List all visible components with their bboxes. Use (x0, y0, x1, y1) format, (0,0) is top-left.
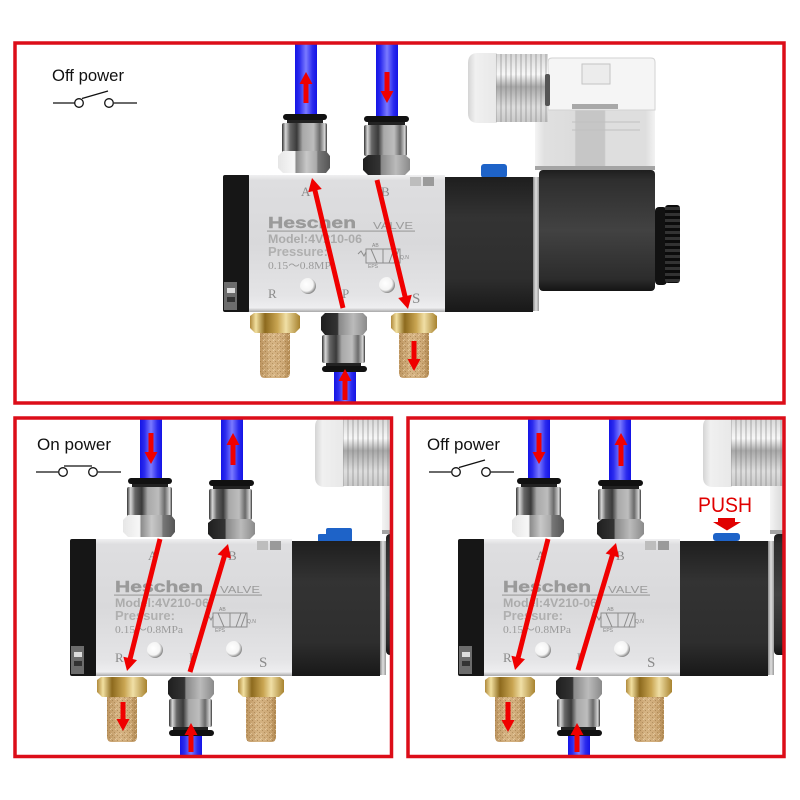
valve symbol (358, 243, 409, 270)
port letters: P (577, 650, 584, 665)
brand and rating text (267, 215, 415, 272)
port letters: R (268, 286, 277, 301)
valve symbol: AB (607, 607, 614, 613)
label: push: PUSH (698, 494, 752, 517)
fitting P (321, 313, 367, 372)
brand and rating text: 0.15～0.8MPa (268, 260, 336, 272)
transparent connector (703, 417, 800, 534)
air tube A (295, 44, 317, 116)
valve assembly, lower right panel (458, 408, 800, 768)
icon: open switch (429, 460, 514, 476)
brand and rating text: Heschen (115, 579, 203, 596)
cable gland (655, 205, 680, 285)
port letters: R (503, 650, 512, 665)
flow arrow: tube A down (144, 433, 158, 464)
flow arrow: tube P up (338, 369, 352, 400)
flow arrow: A to R (123, 538, 162, 671)
flow arrow: tube A up (300, 72, 312, 103)
valve left end cap (458, 539, 485, 676)
brand and rating text: Model:4V210-06 (268, 232, 362, 246)
brand and rating text: Heschen (268, 215, 356, 232)
silencer S (391, 313, 437, 378)
air tube P (334, 372, 356, 402)
fitting P (168, 677, 214, 736)
flow arrow: tube P up (570, 723, 584, 752)
valve symbol: Q.N (247, 619, 256, 625)
valve symbol: EPS (603, 628, 614, 634)
air tube P (568, 734, 590, 768)
transparent connector (315, 420, 390, 534)
port letters: S (412, 291, 420, 307)
heading: off power: Off power (427, 435, 500, 454)
flow arrow: silencer R down (116, 702, 130, 731)
transparent connector (468, 53, 655, 170)
flow arrow: P to B (188, 544, 231, 673)
brand and rating text: Model:4V210-06 (115, 596, 209, 610)
fitting B (363, 116, 410, 175)
valve left end cap (70, 539, 97, 676)
fitting B (597, 480, 644, 539)
brand and rating text (502, 579, 650, 636)
valve symbol: Q.N (635, 619, 644, 625)
valve left end cap (223, 175, 250, 312)
mounting holes (300, 278, 316, 294)
solenoid coil (533, 170, 655, 311)
flow arrow: silencer R down (502, 702, 514, 732)
flow arrow: silencer S down (408, 341, 420, 371)
manual push button (318, 528, 352, 541)
brand and rating text: VALVE (373, 221, 413, 232)
flow arrow: P to A (308, 178, 345, 309)
port letters: B (228, 548, 237, 563)
air tube B (609, 408, 631, 482)
port letters: R (115, 650, 124, 665)
panel: on power, flow P to B and A to R (13, 416, 394, 758)
port letters (503, 548, 655, 671)
brand and rating text: VALVE (220, 585, 260, 596)
port letters (268, 184, 420, 307)
air tube A (528, 408, 550, 480)
flow arrow: tube P up (184, 723, 198, 752)
fitting A (512, 478, 564, 537)
flow arrow: A to R (511, 538, 550, 670)
valve symbol (205, 607, 256, 634)
port letters: B (381, 184, 390, 199)
silencer R (97, 677, 147, 742)
brand and rating text: VALVE (608, 585, 648, 596)
air tube P (180, 736, 202, 755)
silencer S (626, 677, 672, 742)
silencer R (485, 677, 535, 742)
port letters: A (148, 548, 158, 563)
manual push button, pressed (713, 533, 740, 541)
port letters: S (647, 655, 655, 671)
valve symbol: AB (219, 607, 226, 613)
panel frame (408, 418, 784, 756)
flow arrow: tube A down (532, 433, 546, 464)
valve symbol: Q.N (400, 255, 409, 261)
air tube B (376, 44, 398, 118)
valve symbol: EPS (368, 264, 379, 270)
icon: open switch (53, 91, 137, 107)
aluminium valve face (249, 175, 445, 312)
solenoid coil (768, 534, 800, 675)
valve right housing (445, 177, 533, 312)
solenoid coil (380, 534, 390, 675)
aluminium valve face (484, 539, 680, 676)
heading: off power: Off power (52, 66, 124, 85)
silencer S (238, 677, 284, 742)
brand and rating text: Pressure: (115, 608, 175, 623)
flow arrow: B to S (375, 179, 412, 309)
brand and rating text: Model:4V210-06 (503, 596, 597, 610)
port letters: A (536, 548, 546, 563)
fitting P (556, 677, 602, 736)
air tube A (140, 420, 162, 478)
silencer R (250, 313, 300, 378)
fitting A (123, 478, 175, 537)
mounting holes (147, 642, 163, 658)
brand and rating text: Pressure: (268, 244, 328, 259)
panel frame (15, 43, 784, 403)
valve symbol: AB (372, 243, 379, 249)
port letters (115, 548, 267, 671)
fitting B (208, 480, 255, 539)
flow arrow: tube B up (614, 433, 628, 466)
brand and rating text: 0.15～0.8MPa (115, 624, 183, 636)
brand and rating text: 0.15～0.8MPa (503, 624, 571, 636)
mounting holes (535, 642, 551, 658)
port letters: S (259, 655, 267, 671)
panel: off power with manual push, flow P to B and A to R (408, 408, 800, 768)
arrow: push down (713, 518, 741, 530)
flow arrow: P to B (576, 543, 619, 671)
valve right housing (292, 541, 380, 676)
valve assembly, lower left panel (70, 420, 390, 755)
valve symbol (593, 607, 644, 634)
port letters: P (189, 650, 196, 665)
air tube B (221, 420, 243, 480)
port letters: B (616, 548, 625, 563)
port letters: P (342, 286, 349, 301)
aluminium valve face (96, 539, 292, 676)
heading: on power: On power (37, 435, 111, 454)
panel frame (15, 418, 392, 756)
valve right housing (680, 541, 768, 676)
valve symbol: EPS (215, 628, 226, 634)
flow arrow: tube B up (226, 433, 240, 465)
brand and rating text (114, 579, 262, 636)
manual push button (481, 164, 507, 178)
flow arrow: tube B down (380, 72, 394, 103)
brand and rating text: Heschen (503, 579, 591, 596)
fitting A (278, 114, 330, 173)
valve assembly, top panel (223, 44, 680, 404)
brand and rating text: Pressure: (503, 608, 563, 623)
icon: closed switch (36, 466, 121, 476)
port letters: A (301, 184, 311, 199)
panel: off power, flow P to A and B to S (15, 43, 784, 404)
